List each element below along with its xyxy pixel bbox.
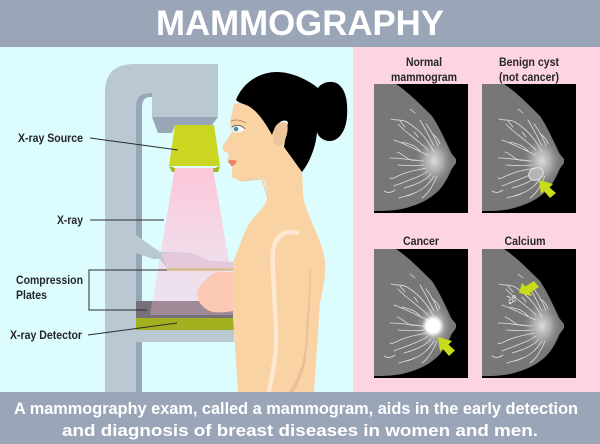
hair: [236, 72, 347, 172]
upper compression arm: [136, 235, 233, 268]
x-ray source unit: [169, 125, 220, 172]
footer bar with caption: [0, 392, 600, 444]
label lines: [88, 138, 178, 335]
neck line: [240, 179, 268, 198]
detector leader: [88, 323, 177, 335]
arrow: [539, 180, 556, 198]
column and head: [105, 64, 218, 392]
label: X-ray Detector: X-ray Detector: [10, 328, 82, 342]
tumour: [422, 315, 444, 337]
arrow: [519, 281, 539, 296]
label: Compression Plates: Plates: [16, 288, 47, 302]
panel: mammogram background: [353, 46, 600, 392]
upper plate edge: [167, 268, 233, 271]
lower plate: [136, 301, 233, 318]
label: X-ray: X-ray: [57, 213, 83, 227]
mammogram: cancer: Cancer: [403, 234, 439, 248]
woman in profile: [197, 72, 347, 392]
support base: [136, 330, 234, 342]
cyst: [527, 165, 545, 183]
header bar with title: [0, 0, 600, 47]
mammogram: calcium: Calcium: [504, 234, 546, 248]
body and face: [222, 100, 325, 392]
caption: A mammography exam, called a mammogram, aids in the early detection: [14, 399, 578, 418]
head underside: [152, 117, 218, 133]
arm shading line: [289, 268, 311, 392]
eye: [231, 120, 246, 133]
caption: [14, 399, 578, 440]
compression plates bracket: [89, 270, 167, 310]
upper compression plate overlay: [161, 253, 233, 268]
panel: machine background: [0, 46, 354, 392]
ear: [273, 122, 288, 146]
mammography machine: [105, 64, 238, 392]
label: Compression Plates: [16, 273, 83, 302]
x-ray leader: [90, 219, 164, 221]
mammogram: benign cyst: [482, 55, 576, 213]
inner column strip: [136, 93, 152, 392]
mammogram: benign cyst: (not cancer): [499, 70, 559, 84]
title: MAMMOGRAPHY: [156, 4, 444, 43]
caption: and diagnosis of breast diseases in women and men.: [62, 421, 538, 440]
mammogram: calcium: [482, 234, 576, 378]
mammogram: cancer: [374, 234, 468, 378]
mammogram: normal: mammogram: [391, 70, 457, 84]
breast: [197, 272, 233, 312]
label: Compression Plates: Compression: [16, 273, 83, 287]
arrow: [438, 337, 455, 356]
mammogram: normal: Normal: [406, 55, 442, 69]
arm highlight: [269, 232, 297, 392]
mammogram: benign cyst: Benign cyst: [499, 55, 559, 69]
detector: [136, 318, 234, 330]
label: X-ray Source: X-ray Source: [18, 131, 83, 145]
x-ray beam: [150, 168, 238, 316]
x-ray source leader: [90, 138, 178, 150]
calcium specks: [507, 296, 516, 304]
lips: [228, 160, 237, 166]
mammogram: normal: [374, 55, 468, 213]
